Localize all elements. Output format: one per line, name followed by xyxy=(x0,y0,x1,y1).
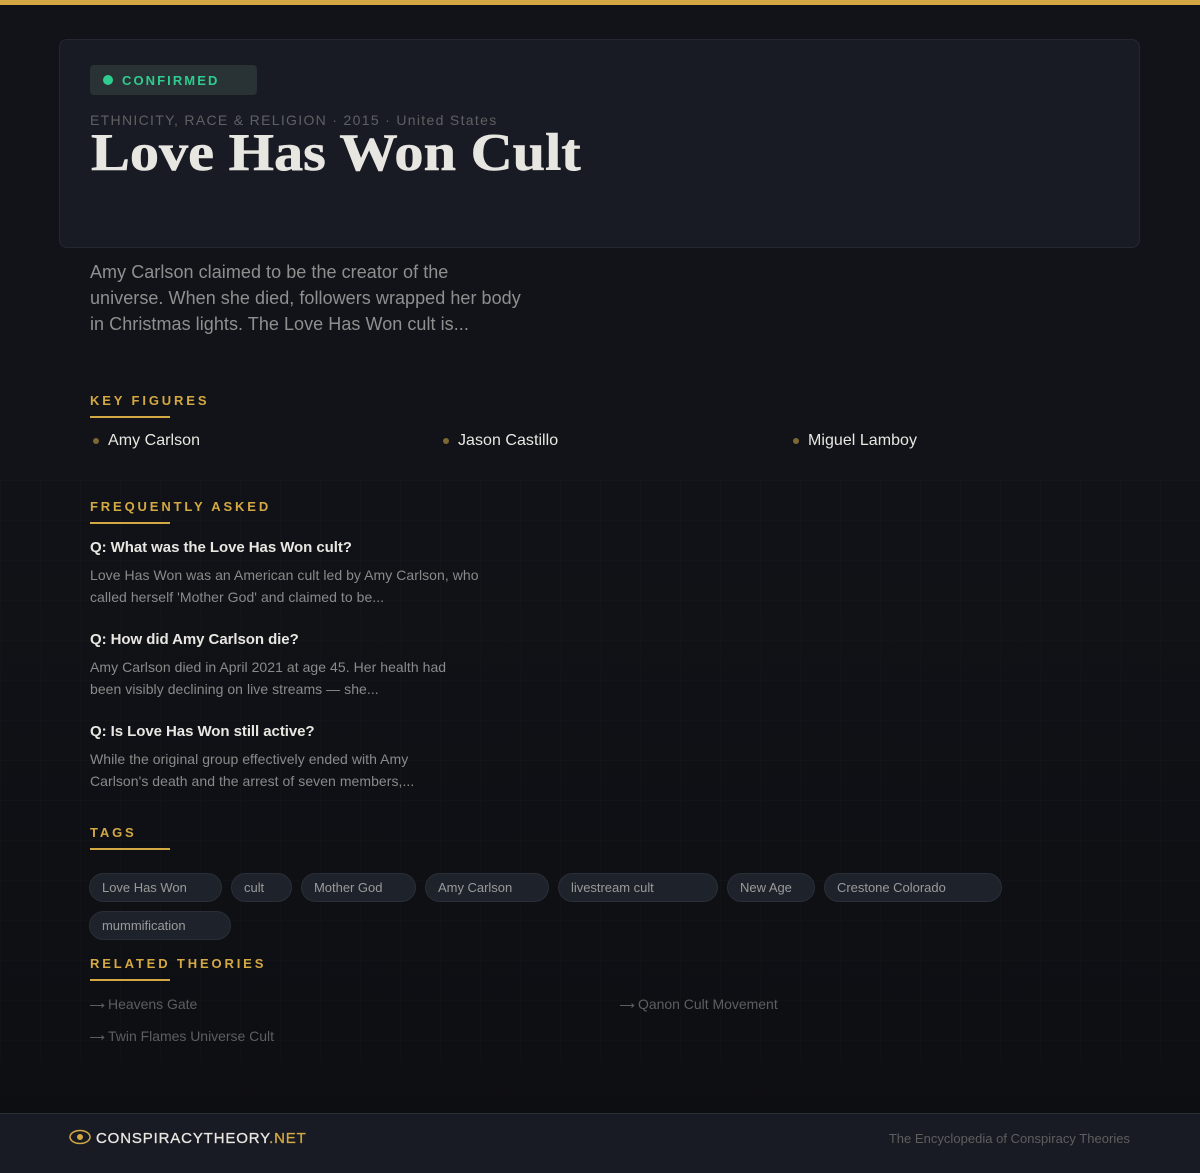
tag: mummification xyxy=(102,918,186,933)
brand wordmark: CONSPIRACYTHEORY.NET xyxy=(96,1130,307,1147)
category meta line: ETHNICITY, RACE & RELIGION · 2015 · United States xyxy=(90,112,498,128)
faq item 3: Q: Is Love Has Won still active? xyxy=(90,723,315,740)
related link: Qanon Cult Movement: Qanon Cult Movement xyxy=(638,996,778,1012)
summary text: universe. When she died, followers wrapped her body xyxy=(90,288,521,308)
icon: eye logo xyxy=(69,1130,91,1144)
related link: Heavens Gate: Heavens Gate xyxy=(108,996,197,1012)
status badge: confirmed xyxy=(90,65,257,95)
faq item 1 xyxy=(90,539,479,605)
heading: frequently asked: FREQUENTLY ASKED xyxy=(90,499,271,514)
faq item 3: Carlson's death and the arrest of seven members,... xyxy=(90,773,414,789)
tag: livestream cult xyxy=(571,880,654,895)
faq item 2 xyxy=(90,631,446,697)
panel: hero header xyxy=(59,39,1140,248)
related link: Twin Flames Universe Cult: Twin Flames Universe Cult xyxy=(108,1028,274,1044)
figure: Jason Castillo: Jason Castillo xyxy=(458,432,558,449)
faq item 3: While the original group effectively ended with Amy xyxy=(90,751,408,767)
heading: key figures: KEY FIGURES xyxy=(90,393,209,408)
status badge: confirmed: CONFIRMED xyxy=(122,73,219,88)
tag: New Age xyxy=(740,880,792,895)
faq item 2: been visibly declining on live streams — she... xyxy=(90,681,379,697)
tag xyxy=(301,873,416,902)
tag: Mother God xyxy=(314,880,382,895)
heading: tags: TAGS xyxy=(90,825,137,840)
faq item 2: Amy Carlson died in April 2021 at age 45. Her health had xyxy=(90,659,446,675)
tag: Crestone Colorado xyxy=(837,880,946,895)
figure: Miguel Lamboy: Miguel Lamboy xyxy=(808,432,917,449)
footer xyxy=(0,1113,1200,1173)
tag list xyxy=(89,873,1002,940)
faq item 1: called herself 'Mother God' and claimed to be... xyxy=(90,589,384,605)
figure: Amy Carlson: Amy Carlson xyxy=(108,432,200,449)
summary text: in Christmas lights. The Love Has Won cult is... xyxy=(90,314,469,334)
faq item 3 xyxy=(90,723,414,789)
heading: related theories: RELATED THEORIES xyxy=(90,956,266,971)
tag: Love Has Won xyxy=(102,880,187,895)
tag xyxy=(425,873,549,902)
tag xyxy=(231,873,292,902)
summary text: Amy Carlson claimed to be the creator of the xyxy=(90,262,448,282)
faq item 2: Q: How did Amy Carlson die? xyxy=(90,631,299,648)
tag xyxy=(824,873,1002,902)
tag xyxy=(727,873,815,902)
summary text xyxy=(90,262,521,334)
tag xyxy=(89,873,222,902)
footer tagline: The Encyclopedia of Conspiracy Theories xyxy=(889,1131,1130,1146)
tag xyxy=(558,873,718,902)
tag xyxy=(89,911,231,940)
tag: Amy Carlson xyxy=(438,880,512,895)
faq item 1: Love Has Won was an American cult led by Amy Carlson, who xyxy=(90,567,479,583)
faq item 1: Q: What was the Love Has Won cult? xyxy=(90,539,352,556)
tag: cult xyxy=(244,880,264,895)
title: Love Has Won Cult xyxy=(91,124,581,182)
top accent bar xyxy=(0,0,1200,5)
